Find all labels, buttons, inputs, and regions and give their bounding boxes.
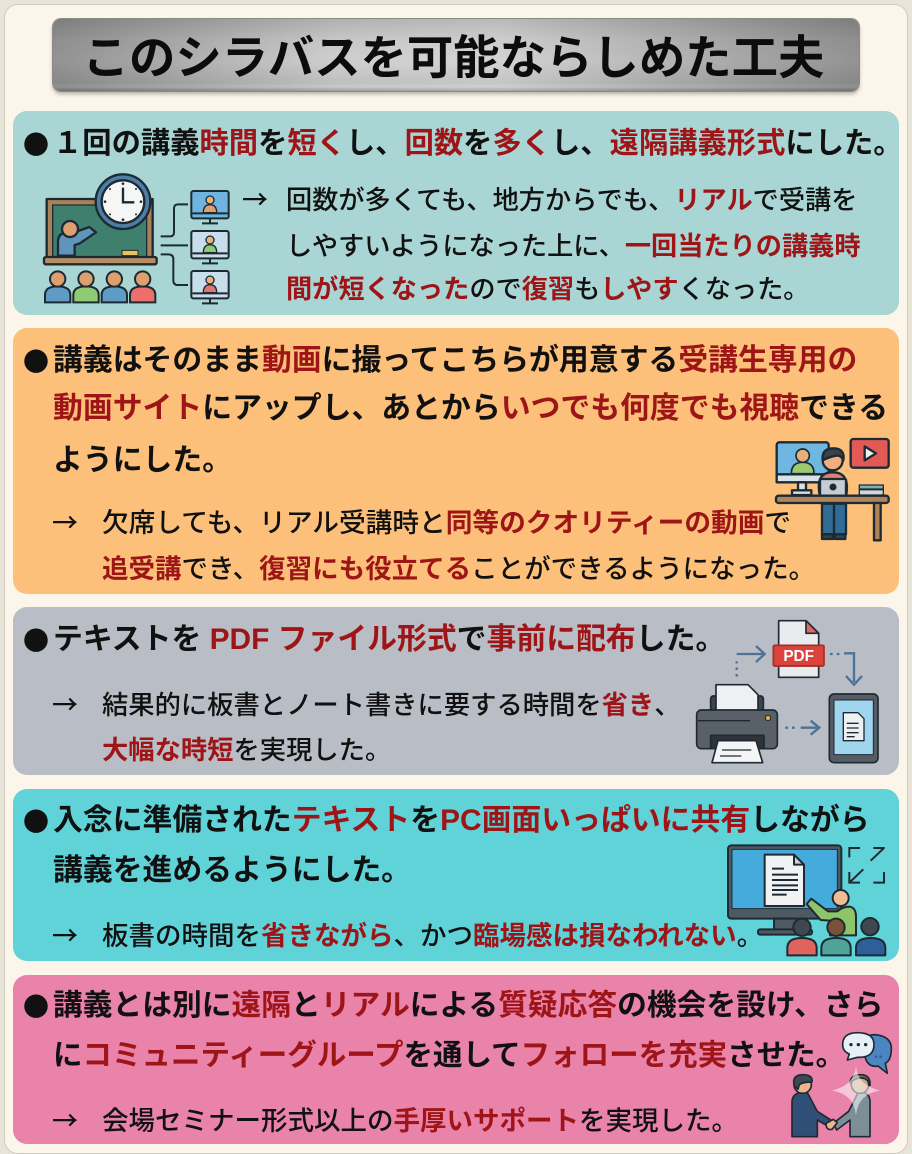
heading: screen sharing: 講義を進めるようにした。 bbox=[53, 854, 411, 887]
icon: classroom with clock and remote screens bbox=[42, 173, 230, 304]
heading: lecture format: １回の講義時間を短くし、回数を多くし、遠隔講義形式にした。 bbox=[53, 127, 903, 160]
heading: video site: ようにした。 bbox=[53, 444, 232, 477]
text block: result of follow-up support: 会場セミナー形式以上の手厚いサポートを実現した。 bbox=[102, 1106, 738, 1136]
heading: video site: 講義はそのまま動画に撮ってこちらが用意する受講生専用の bbox=[53, 344, 857, 377]
text block: result of shorter lectures: しやすいようになった上に、一回当たりの講義時 bbox=[286, 231, 861, 261]
text block: result of screen sharing: 板書の時間を省きながら、かつ臨場感は損なわれない。 bbox=[102, 921, 763, 951]
heading: PDF distribution: テキストを PDF ファイル形式で事前に配布した。 bbox=[53, 623, 725, 656]
panel: screen-shared text bbox=[13, 789, 899, 961]
text block: result of PDF distribution: 大幅な時短を実現した。 bbox=[102, 735, 391, 765]
text block: result of video archive bbox=[52, 503, 815, 584]
text block: result of follow-up support: → bbox=[52, 1101, 78, 1138]
icon: printer to PDF to tablet bbox=[696, 620, 879, 764]
heading: video site bbox=[23, 342, 888, 477]
panel: recorded lecture videos bbox=[13, 328, 899, 594]
text block: result of video archive: → bbox=[52, 503, 78, 540]
text block: result of video archive: 欠席しても、リアル受講時と同等のクオリティーの動画で bbox=[102, 508, 791, 538]
title: このシラバスを可能ならしめた工夫 bbox=[83, 32, 824, 84]
heading: screen sharing: ● bbox=[23, 802, 49, 839]
heading: screen sharing bbox=[23, 802, 870, 887]
title bbox=[53, 19, 859, 91]
text block: result of shorter lectures: 間が短くなったので復習もしやすくなった。 bbox=[286, 274, 810, 304]
icon: printer to PDF to tablet: PDF bbox=[783, 648, 814, 665]
heading: PDF distribution: ● bbox=[23, 621, 49, 658]
text block: result of PDF distribution: → bbox=[52, 685, 78, 722]
icon: person watching video at desk bbox=[774, 438, 890, 542]
panel: shorter remote lectures bbox=[13, 111, 899, 315]
heading: Q&A opportunities bbox=[23, 987, 883, 1072]
text block: result of shorter lectures: 回数が多くても、地方からでも、リアルで受講を bbox=[286, 185, 857, 215]
panel: PDF text distribution bbox=[13, 607, 899, 775]
heading: video site: ● bbox=[23, 342, 49, 379]
text block: result of PDF distribution bbox=[52, 685, 681, 765]
text block: result of screen sharing: → bbox=[52, 916, 78, 953]
heading: Q&A opportunities: にコミュニティーグループを通してフォローを充実させた。 bbox=[53, 1039, 845, 1072]
text block: result of PDF distribution: 結果的に板書とノート書きに要する時間を省き、 bbox=[102, 690, 681, 720]
text block: result of shorter lectures bbox=[242, 180, 861, 304]
heading: Q&A opportunities: 講義とは別に遠隔とリアルによる質疑応答の機会を設け、さら bbox=[53, 989, 883, 1022]
text block: result of shorter lectures: → bbox=[242, 180, 268, 217]
heading: screen sharing: 入念に準備されたテキストをPC画面いっぱいに共有しながら bbox=[53, 804, 870, 837]
heading: lecture format: ● bbox=[23, 125, 49, 162]
heading: video site: 動画サイトにアップし、あとからいつでも何度でも視聴できる bbox=[53, 392, 888, 425]
icon: handshake and speech bubbles bbox=[791, 1032, 892, 1138]
icon: presenter with shared screen and audience bbox=[727, 844, 886, 956]
panel: Q&A and community follow-up bbox=[13, 975, 899, 1144]
heading: Q&A opportunities: ● bbox=[23, 987, 49, 1024]
text block: result of video archive: 追受講でき、復習にも役立てることができるようになった。 bbox=[102, 554, 815, 584]
